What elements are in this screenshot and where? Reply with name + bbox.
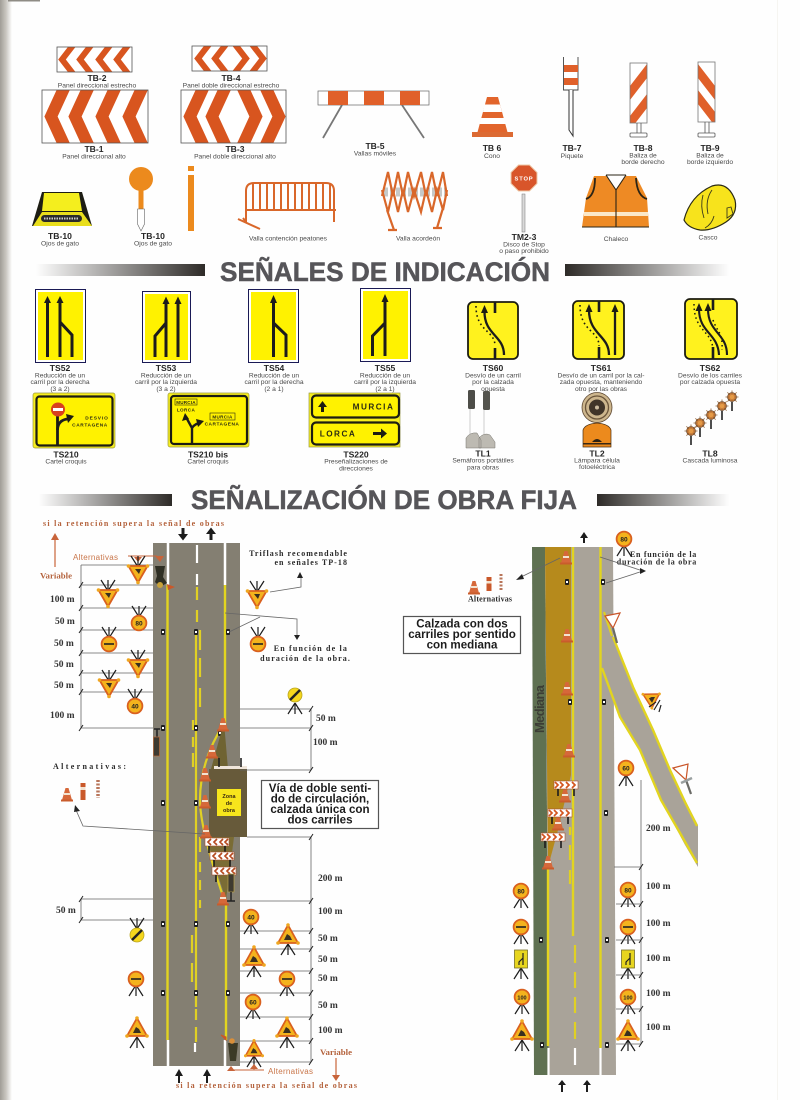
icon: TB-10 paddle stake xyxy=(129,167,153,231)
heading: señalización de obra fija: SEÑALIZACIÓN DE OBRA FIJA xyxy=(191,484,577,515)
icon: TB-7 stake xyxy=(564,57,578,136)
dimension lines right: 100 m xyxy=(313,738,338,748)
label: TS55: (2 a 1) xyxy=(375,386,395,393)
sign: TS62 xyxy=(685,299,737,359)
label: TB-1: TB-1 xyxy=(84,144,104,154)
dimension lines left: 100 m xyxy=(50,711,75,721)
label: TB-6: Cono xyxy=(484,153,500,160)
icon: TL8 light cascade xyxy=(684,390,738,445)
label: TS220: Preseñalizaciones de xyxy=(324,458,388,466)
dimension lines: 100 m xyxy=(646,989,671,999)
duration note: duración de la obra. xyxy=(260,654,351,663)
label: TM2-3: o paso prohibido xyxy=(499,248,549,255)
icon: flagger bottom xyxy=(221,1035,238,1061)
dimension lines left: 50 m xyxy=(54,681,74,691)
label: TS55 xyxy=(354,363,416,393)
label: TB-9: borde izquierdo xyxy=(687,159,733,166)
sign: TS210: CARTAGENA xyxy=(72,422,108,428)
label: TM2-3 xyxy=(499,232,549,255)
chevron panels right xyxy=(541,781,578,848)
sign: TS53 xyxy=(142,292,190,362)
label: TB-1 xyxy=(62,144,126,160)
box: caption dual carriageway: con mediana xyxy=(427,638,498,652)
dimension lines: 100 m xyxy=(646,1023,671,1033)
label: TS55: Reducción de un xyxy=(360,372,410,380)
dimension lines: 100 m xyxy=(646,882,671,892)
duration note: duración de la obra xyxy=(617,558,697,566)
icon: accordion fence xyxy=(382,172,447,230)
label: TB-9: TB-9 xyxy=(700,143,720,153)
dimension lines left: 50 m xyxy=(55,617,75,627)
label: TS210 bis xyxy=(187,450,229,466)
label: TB-7 xyxy=(561,143,584,160)
label: TB-8: TB-8 xyxy=(633,143,653,153)
road: left diagram xyxy=(153,543,240,1066)
box: caption dual carriageway xyxy=(404,616,520,654)
icon: TB-10 road stud xyxy=(32,192,92,226)
label: TS53: TS53 xyxy=(156,363,176,373)
icon: TL1 portable traffic lights xyxy=(466,390,495,448)
label: TB-3: TB-3 xyxy=(225,144,245,154)
sign: top 80 xyxy=(617,532,631,556)
icon: TB-8 right edge beacon xyxy=(630,63,647,137)
heading: señales de indicación: SEÑALES DE INDICACIÓN xyxy=(220,256,550,287)
road: right diagram xyxy=(532,547,698,1075)
panel: dual carriageway diagram xyxy=(404,532,698,1092)
label: Alternativas top: Alternativas xyxy=(73,553,118,562)
signs: left column upper: 80 xyxy=(135,620,143,628)
box: caption single carriageway: calzada única con xyxy=(270,803,370,816)
dimension lines right: 50 m xyxy=(318,974,338,984)
label: TS60: por la calzada xyxy=(472,379,514,386)
label: Variable top: Variable xyxy=(40,572,72,580)
label: TS54 xyxy=(244,363,304,393)
label: TB-3 xyxy=(194,144,276,160)
signs: column right of road: 80 xyxy=(624,888,632,894)
label: TS60: TS60 xyxy=(483,363,503,373)
icon: TB-9 left edge beacon xyxy=(698,62,715,137)
label: TL2 xyxy=(574,448,620,471)
dimension lines: 100 m xyxy=(646,954,671,964)
label: TB-2: Panel direccional estrecho xyxy=(58,82,136,90)
signs: column left of road: 80 xyxy=(517,888,525,896)
label: TS220 xyxy=(324,450,388,472)
arrow: top xyxy=(580,532,588,543)
label: TB-4: TB-4 xyxy=(221,73,241,83)
chevron panels xyxy=(205,838,236,882)
label: TB-6 xyxy=(483,143,502,160)
signs: left column lower xyxy=(125,910,300,1067)
arrow: variable up xyxy=(51,533,59,567)
dimension lines right: 50 m xyxy=(318,934,338,944)
label: TS210: TS210 xyxy=(53,450,79,460)
label: TB-7: Piquete xyxy=(561,153,584,160)
sign: TS60 xyxy=(468,302,518,359)
label: TS54: carril por la derecha xyxy=(244,379,304,386)
dimension lines left: 50 m xyxy=(56,906,76,916)
dimension lines right xyxy=(240,706,343,1065)
label: TS61 xyxy=(558,363,644,393)
icon: flagger top xyxy=(155,566,175,590)
label: TS61: TS61 xyxy=(591,363,611,373)
label: TS54: TS54 xyxy=(264,363,284,373)
sign: TS210 xyxy=(33,393,115,448)
label: TB-10 paddle: TB-10 xyxy=(141,231,165,241)
triflash note xyxy=(249,549,348,592)
label: Mediana: Mediana xyxy=(532,684,547,733)
icon: TB-2 narrow directional panel xyxy=(56,46,132,72)
label: TB-10 paddle: Ojos de gato xyxy=(134,240,172,248)
alternatives block xyxy=(468,558,560,604)
sign: TS210 bis: CARTAGENA xyxy=(205,422,239,428)
label: accordion fence: Valla acordeón xyxy=(396,236,440,242)
label: TL1: Semáforos portátiles xyxy=(452,458,514,464)
label: TS61: Desvío de un carril por la cal- xyxy=(558,372,644,380)
label: TL2: Lámpara célula xyxy=(574,458,620,464)
label: TL1 xyxy=(452,448,514,472)
icon: pedestrian fence xyxy=(238,183,336,229)
label: TS210 bis: TS210 bis xyxy=(188,450,228,460)
label: TS210 bis: Cartel croquis xyxy=(187,458,229,466)
heading: señalización de obra fija xyxy=(38,484,730,515)
sign: TS220: LORCA xyxy=(320,430,356,438)
alternatives block: Alternativas xyxy=(468,594,512,604)
label: TB-4 xyxy=(183,73,280,90)
box: caption dual carriageway: carriles por sentido xyxy=(408,628,516,641)
arrows: traffic direction top xyxy=(178,528,216,540)
text: top note: si la retención supera la señal de obras xyxy=(43,519,224,528)
label: TL1: para obras xyxy=(467,464,500,472)
label: TS62 xyxy=(678,363,743,386)
label: TS52: Reducción de un xyxy=(35,372,85,380)
label: TB-10 paddle xyxy=(134,231,172,248)
label: Chaleco: Chaleco xyxy=(604,236,629,243)
signs: column right of road xyxy=(616,883,640,1051)
label: TS55: TS55 xyxy=(375,363,395,373)
signs: left column lower: 60 xyxy=(249,1000,257,1006)
bottom annotations: Variable xyxy=(320,1048,352,1057)
label: TS220: TS220 xyxy=(343,450,369,460)
dimension lines right: 100 m xyxy=(318,1026,343,1036)
sign: top 80: 80 xyxy=(620,536,628,544)
dimension lines right: 200 m xyxy=(318,874,343,884)
label: TM2-3: Disco de Stop xyxy=(503,242,545,248)
label: fence: Valla contención peatones xyxy=(249,236,328,242)
box: caption single carriageway: do de circulación, xyxy=(271,792,369,806)
signs on slip road xyxy=(605,613,692,794)
label: TS60: opuesta xyxy=(481,386,505,393)
work zone xyxy=(206,722,247,900)
label: TS61: zada opuesta, manteniendo xyxy=(560,379,643,386)
dimension lines right: 50 m xyxy=(318,955,338,965)
label: Alternativas top xyxy=(73,553,164,562)
triflash note: en señales TP-18 xyxy=(274,558,348,567)
heading: señales de indicación xyxy=(35,256,730,287)
icon: orange post xyxy=(188,166,194,231)
label: TM2-3: TM2-3 xyxy=(512,232,537,242)
label: TS54: (2 a 1) xyxy=(264,386,284,393)
dimension lines right: 50 m xyxy=(316,714,336,724)
label: TB-5: Vallas móviles xyxy=(354,150,397,158)
dimension lines right: 100 m xyxy=(318,907,343,917)
sign: TS210 bis: LORCA xyxy=(177,408,195,412)
dimension lines left xyxy=(50,565,153,923)
icon: stop disc: STOP xyxy=(515,176,533,182)
label: TS53 xyxy=(135,363,197,393)
signs: column left of road: 100 xyxy=(517,996,527,1002)
label: TS55: carril por la izquierda xyxy=(354,379,416,386)
panel: indication signs xyxy=(30,288,743,472)
label: TB-6: TB 6 xyxy=(483,143,502,153)
icon: TB-1 tall directional panel xyxy=(42,90,148,144)
icon: TL2 photocell lamp xyxy=(582,392,612,447)
label: TB-9: Baliza de xyxy=(696,152,724,160)
label: TS62: TS62 xyxy=(700,363,720,373)
icon: TB-3 tall double panel xyxy=(180,90,286,144)
signs: left column upper xyxy=(97,556,302,714)
work zone: obra xyxy=(223,808,236,814)
label: TS53: carril por la izquierda xyxy=(135,379,197,386)
label: TS52: carril por la derecha xyxy=(30,379,90,386)
label: Casco: Casco xyxy=(699,234,718,242)
label: TS52: (3 a 2) xyxy=(50,386,70,393)
alternatives block: Alternativas: xyxy=(53,762,126,771)
dimension lines right: 50 m xyxy=(318,1001,338,1011)
icon: stop disc xyxy=(511,165,537,232)
sign: TS220: MURCIA xyxy=(353,402,394,412)
duration note: En función de la xyxy=(274,644,348,653)
sign: TS210 bis: MURCIA xyxy=(212,414,233,420)
dimension lines left: 100 m xyxy=(50,595,75,605)
label: TB-8 xyxy=(621,143,665,166)
label: TB-8: borde derecho xyxy=(621,159,665,166)
label: TS210 xyxy=(45,450,87,466)
box: caption dual carriageway: Calzada con dos xyxy=(416,618,508,630)
sign: TS210 bis xyxy=(168,393,249,447)
sign: TS61 xyxy=(573,301,624,359)
label: TB-5: TB-5 xyxy=(365,141,385,151)
label: TS53: Reducción de un xyxy=(141,372,191,380)
label: TB-2 xyxy=(58,73,136,90)
triflash note: Triflash recomendable xyxy=(249,549,348,558)
arrows: bottom xyxy=(558,1080,591,1092)
signs: column left of road xyxy=(510,884,534,1051)
icon: TB-4 double narrow panel xyxy=(192,46,268,72)
label: TL8: TL8 xyxy=(702,448,718,458)
icon: TB-5 mobile barrier xyxy=(318,91,429,138)
box: caption single carriageway xyxy=(262,780,378,828)
label: TL8: Cascada luminosa xyxy=(682,458,738,464)
sign: TS210: DESVIO xyxy=(85,416,109,422)
label: TB-5 xyxy=(354,141,397,158)
label: TS60: Desvío de un carril xyxy=(465,372,521,380)
label: TL2: fotoeléctrica xyxy=(579,464,615,471)
label: TB-9 xyxy=(687,143,733,166)
label: TS220: direcciones xyxy=(339,466,374,472)
sign: TS220 xyxy=(309,393,400,447)
sign: TS55 xyxy=(360,288,410,362)
dimension lines left: 50 m xyxy=(54,660,74,670)
label: TB-1: Panel direccional alto xyxy=(62,154,126,160)
sign: TS54 xyxy=(248,290,298,362)
sign: TS210 bis: MURCIA xyxy=(176,400,196,405)
dimension lines: 200 m xyxy=(646,824,671,834)
label: TS53: (3 a 2) xyxy=(156,386,176,393)
work zone: de xyxy=(226,801,232,807)
panel: balizamiento equipment xyxy=(32,42,736,255)
cones along taper xyxy=(199,718,229,906)
dimension lines xyxy=(614,780,671,1047)
signs: left column upper: 40 xyxy=(131,704,139,710)
icon: TB-6 cone xyxy=(472,97,513,137)
signs on slip road: 60 xyxy=(622,766,630,772)
alternatives block xyxy=(53,762,205,834)
dimension lines: 100 m xyxy=(646,919,671,929)
icon: traffic lights on road xyxy=(154,729,235,901)
label: TS61: otro por las obras xyxy=(575,386,628,393)
label: TS62: Desvío de los carriles xyxy=(678,372,743,380)
label: TS62: por calzada opuesta xyxy=(680,379,740,386)
bottom annotations: Alternativas xyxy=(268,1067,313,1076)
signs: left column lower: 40 xyxy=(247,914,255,922)
label: TS52: TS52 xyxy=(50,363,70,373)
label: TS210: Cartel croquis xyxy=(45,458,87,466)
sign: TS52 xyxy=(36,290,86,362)
bottom annotations xyxy=(175,1048,357,1090)
label: TS60 xyxy=(465,363,521,393)
label: TB-10: Ojos de gato xyxy=(41,240,79,248)
duration note xyxy=(225,613,351,663)
signs: column right of road: 100 xyxy=(623,996,633,1002)
dimension lines left: 50 m xyxy=(54,639,74,649)
label: TB-10: TB-10 xyxy=(48,231,72,241)
label: TB-4: Panel doble direccional estrecho xyxy=(183,82,280,90)
bottom annotations: si la retención supera la señal de obras xyxy=(176,1081,357,1090)
box: caption single carriageway: Vía de doble senti- xyxy=(269,782,371,795)
label: TS54: Reducción de un xyxy=(249,372,299,380)
label: TL2: TL2 xyxy=(589,448,605,458)
box: caption single carriageway: dos carriles xyxy=(287,814,353,826)
cones on closed lane xyxy=(542,551,575,870)
label: TL1: TL1 xyxy=(475,448,491,458)
icon: hard hat xyxy=(684,185,736,230)
label: TB-10 xyxy=(41,231,79,248)
duration note xyxy=(600,550,697,583)
label: TB-8: Baliza de xyxy=(629,152,657,160)
label: TL8 xyxy=(682,448,738,464)
label: TB-7: TB-7 xyxy=(562,143,582,153)
label: TS52 xyxy=(30,363,90,393)
work zone: Zona xyxy=(222,794,237,800)
panel: two-way single carriageway diagram xyxy=(40,519,378,1090)
label: TB-2: TB-2 xyxy=(87,73,107,83)
label: TB-3: Panel doble direccional alto xyxy=(194,154,276,160)
duration note: En función de la xyxy=(630,550,697,559)
icon: safety vest xyxy=(582,175,649,227)
